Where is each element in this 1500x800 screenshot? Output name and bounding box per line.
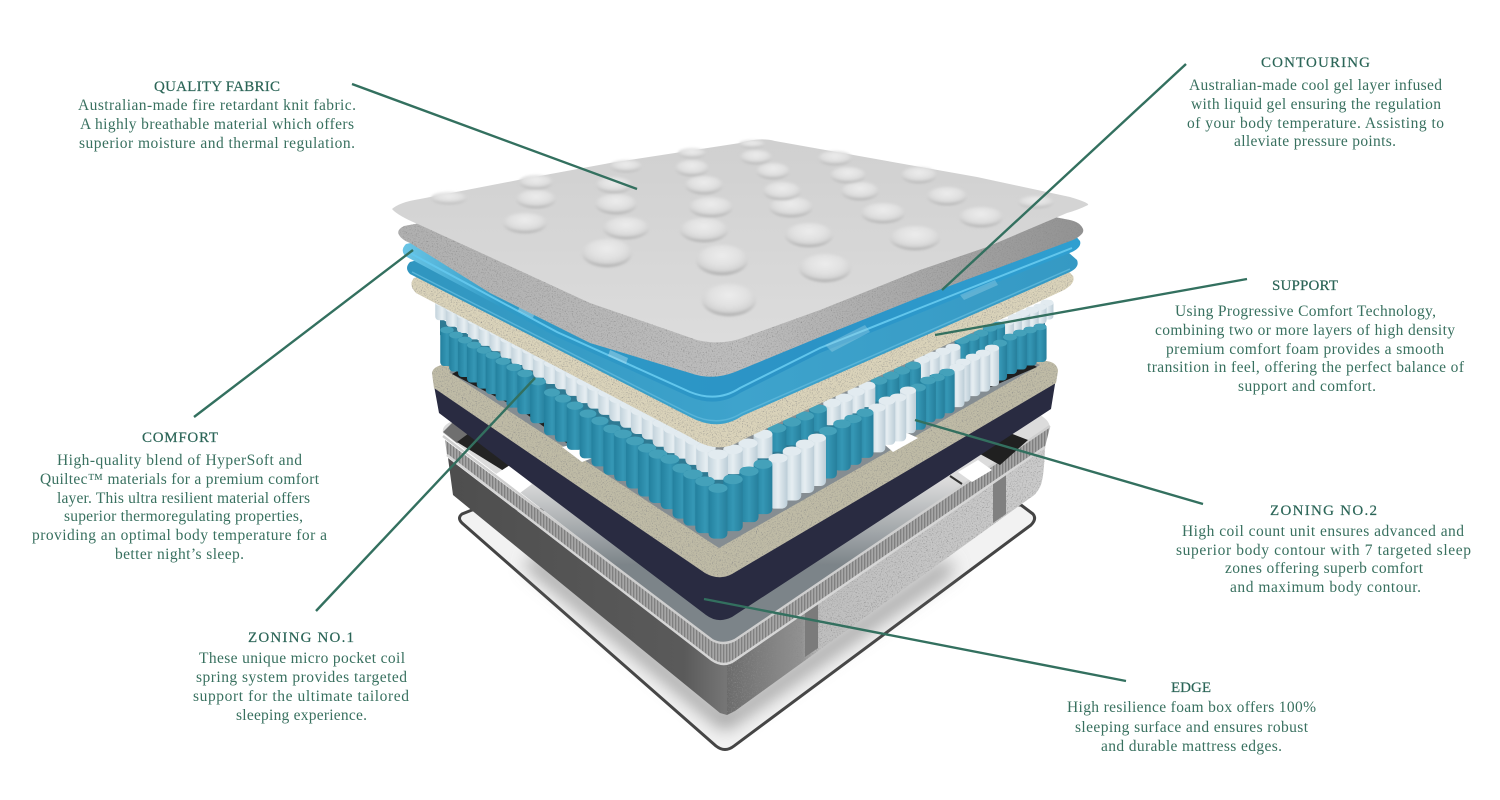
text block: edge: and durable mattress edges. [1101, 738, 1282, 755]
text block: edge: High resilience foam box offers 100% [1067, 699, 1316, 716]
text block: edge [1067, 680, 1316, 755]
quilted top fabric [392, 139, 1088, 342]
foam tray [443, 300, 1050, 644]
text block: quality fabric: superior moisture and thermal regulation. [79, 135, 355, 152]
text block: zoning no.1 [193, 630, 409, 724]
lower coil row [440, 324, 1047, 539]
text block: quality fabric: A highly breathable material which offers [80, 116, 354, 133]
text block: zoning no.1: sleeping experience. [236, 707, 367, 724]
text block: zoning no.1: support for the ultimate tailored [193, 688, 409, 705]
text block: contouring: with liquid gel ensuring the regulation [1191, 96, 1441, 113]
text block: edge: EDGE [1171, 680, 1211, 696]
text block: comfort: better night’s sleep. [115, 546, 244, 563]
pocket coils [435, 300, 1053, 539]
knit border band [443, 426, 1050, 664]
text block: quality fabric [78, 79, 356, 152]
text block: zoning no.2: High coil count unit ensures advanced and [1182, 523, 1464, 540]
base sheet [460, 505, 1035, 750]
text block: support: transition in feel, offering the perfect balance of [1147, 359, 1465, 376]
gel patches [825, 325, 870, 352]
grey foam layer [398, 160, 1083, 377]
text block: contouring: CONTOURING [1261, 55, 1370, 71]
frame opening [449, 215, 1040, 548]
text block: quality fabric: QUALITY FABRIC [154, 79, 280, 95]
text block: support: SUPPORT [1272, 278, 1338, 294]
leader line: zoning no.1 [316, 378, 535, 611]
quilting dimples [431, 140, 1054, 316]
text block: contouring: Australian-made cool gel layer infused [1189, 77, 1442, 94]
mattress illustration [392, 139, 1088, 749]
text block: contouring: of your body temperature. Assisting to [1187, 115, 1444, 132]
text block: comfort: superior thermoregulating properties, [64, 508, 303, 525]
leader line: contouring [942, 64, 1186, 290]
text block: edge: sleeping surface and ensures robust [1075, 719, 1309, 736]
text block: zoning no.1: ZONING NO.1 [248, 630, 354, 646]
upper blue gel layer [403, 165, 1080, 402]
text block: comfort: layer. This ultra resilient material offers [57, 490, 310, 507]
text block: comfort: COMFORT [142, 430, 218, 446]
text block: zoning no.2: superior body contour with 7 targeted sleep [1176, 542, 1471, 559]
text block: contouring [1187, 55, 1444, 150]
text block: support: premium comfort foam provides a smooth [1166, 341, 1444, 358]
text block: zoning no.2: zones offering superb comfort [1225, 560, 1424, 577]
support slats [443, 420, 1028, 493]
text block: comfort [32, 430, 327, 563]
text block: comfort: Quiltec™ materials for a premium comfort [40, 471, 320, 488]
lower blue gel layer [407, 170, 1078, 424]
text block: zoning no.2: ZONING NO.2 [1270, 503, 1377, 519]
coil stems [440, 318, 1045, 505]
leader line: comfort [194, 250, 413, 417]
navy foam box side [433, 378, 1056, 620]
beige foam frame [432, 205, 1058, 577]
text block: support: support and comfort. [1238, 378, 1376, 395]
text block: support: combining two or more layers of high density [1155, 322, 1455, 339]
text block: comfort: High-quality blend of HyperSoft and [57, 452, 302, 469]
text block: zoning no.1: spring system provides targeted [196, 669, 407, 686]
leader line: edge [704, 599, 1126, 681]
text block: quality fabric: Australian-made fire retardant knit fabric. [78, 97, 356, 114]
leader line: zoning no.2 [915, 420, 1203, 504]
text block: zoning no.2 [1176, 503, 1471, 596]
leader line: quality fabric [352, 84, 637, 189]
text block: zoning no.2: and maximum body contour. [1230, 579, 1421, 596]
text block: support [1147, 278, 1465, 395]
beige comfort layer [411, 170, 1074, 447]
text block: contouring: alleviate pressure points. [1234, 133, 1396, 150]
text block: support: Using Progressive Comfort Technology, [1175, 303, 1436, 320]
text block: comfort: providing an optimal body temperature for a [32, 527, 327, 544]
upper coil row [435, 300, 1053, 480]
text block: zoning no.1: These unique micro pocket coil [199, 650, 405, 667]
leader line: support [935, 279, 1247, 335]
lower side band [448, 447, 1045, 715]
